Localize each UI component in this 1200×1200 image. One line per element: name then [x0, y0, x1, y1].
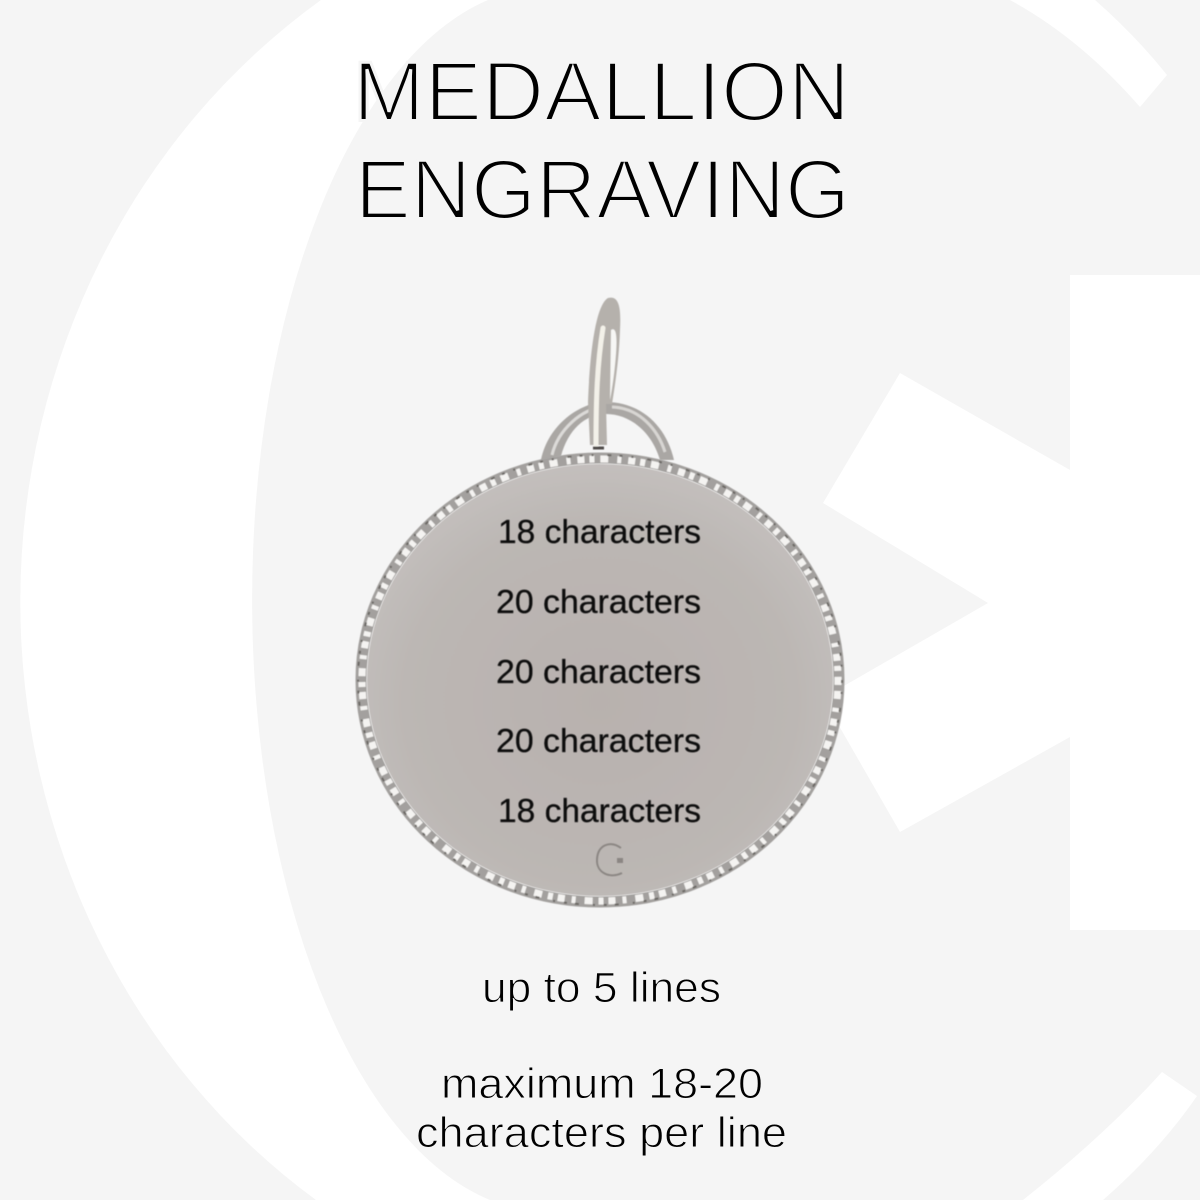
title: ENGRAVING	[355, 142, 850, 236]
bail arch	[541, 402, 674, 460]
caption: maximum 18-20	[441, 1060, 763, 1108]
jump ring loop	[588, 298, 620, 448]
medallion pendant	[358, 298, 842, 905]
maker's mark	[597, 844, 623, 875]
title	[353, 44, 850, 236]
engraving lines: 18 characters	[498, 514, 701, 551]
engraving lines	[496, 514, 701, 830]
engraving lines: 18 characters	[498, 793, 701, 830]
title: MEDALLION	[353, 44, 850, 138]
caption: characters per line	[416, 1109, 787, 1157]
engraving lines: 20 characters	[496, 584, 701, 621]
caption	[416, 964, 787, 1157]
caption: up to 5 lines	[482, 964, 721, 1012]
engraving lines: 20 characters	[496, 723, 701, 760]
medallion face	[367, 464, 833, 896]
medallion rim	[358, 455, 842, 905]
watermark logo: arrow E	[823, 275, 1200, 930]
engraving lines: 20 characters	[496, 654, 701, 691]
